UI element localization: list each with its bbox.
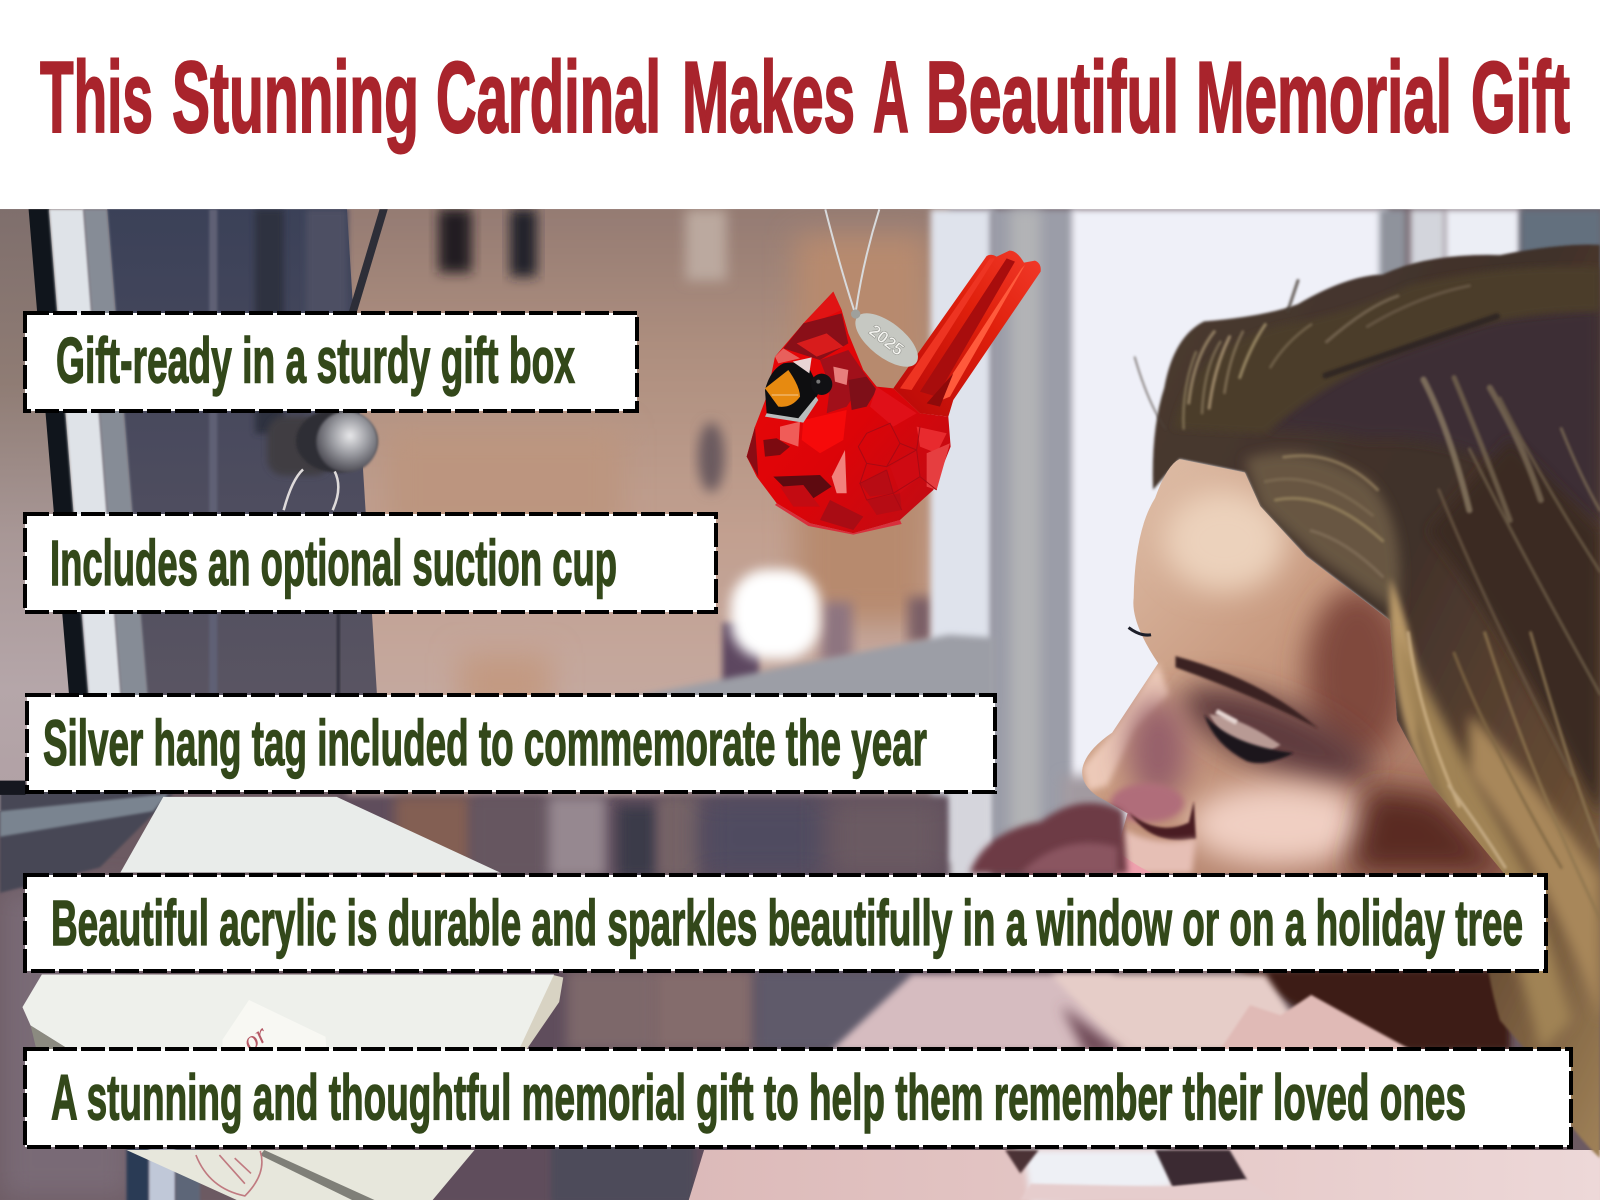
- title: Beautiful: [926, 42, 1179, 154]
- lower room background: [0, 781, 991, 1200]
- title: Cardinal: [436, 42, 661, 154]
- title: [40, 42, 1570, 154]
- gift box: or: [236, 1018, 274, 1057]
- eye: [811, 374, 832, 395]
- body: [747, 292, 951, 533]
- callout box 2: [25, 514, 716, 612]
- hanging string: [825, 209, 879, 310]
- callout box 3: [27, 695, 995, 792]
- woman: arms and sweater: [689, 969, 1600, 1200]
- hair strands: [1135, 281, 1600, 918]
- woman: face: [969, 449, 1510, 878]
- title: Stunning: [172, 42, 419, 154]
- title: A: [873, 42, 908, 154]
- silver year tag: 2025: [865, 320, 908, 360]
- black mask: [765, 362, 820, 420]
- facets: [747, 292, 950, 535]
- callout box 1: Gift-ready in a sturdy gift box: [56, 324, 575, 396]
- tail: [893, 251, 1041, 417]
- callout box 1: [25, 313, 637, 411]
- gift box: [22, 797, 563, 1200]
- beak: [765, 370, 800, 407]
- callout box 3: Silver hang tag included to commemorate the year: [43, 707, 927, 779]
- title: This: [40, 42, 153, 154]
- icon: cardinal ornament: [747, 209, 1041, 535]
- woman: hair: [1135, 245, 1600, 1158]
- title: Makes: [682, 42, 855, 154]
- silver year tag: [847, 303, 927, 377]
- suction cup and hook in background: [267, 409, 378, 510]
- callout box 2: Includes an optional suction cup: [50, 527, 617, 599]
